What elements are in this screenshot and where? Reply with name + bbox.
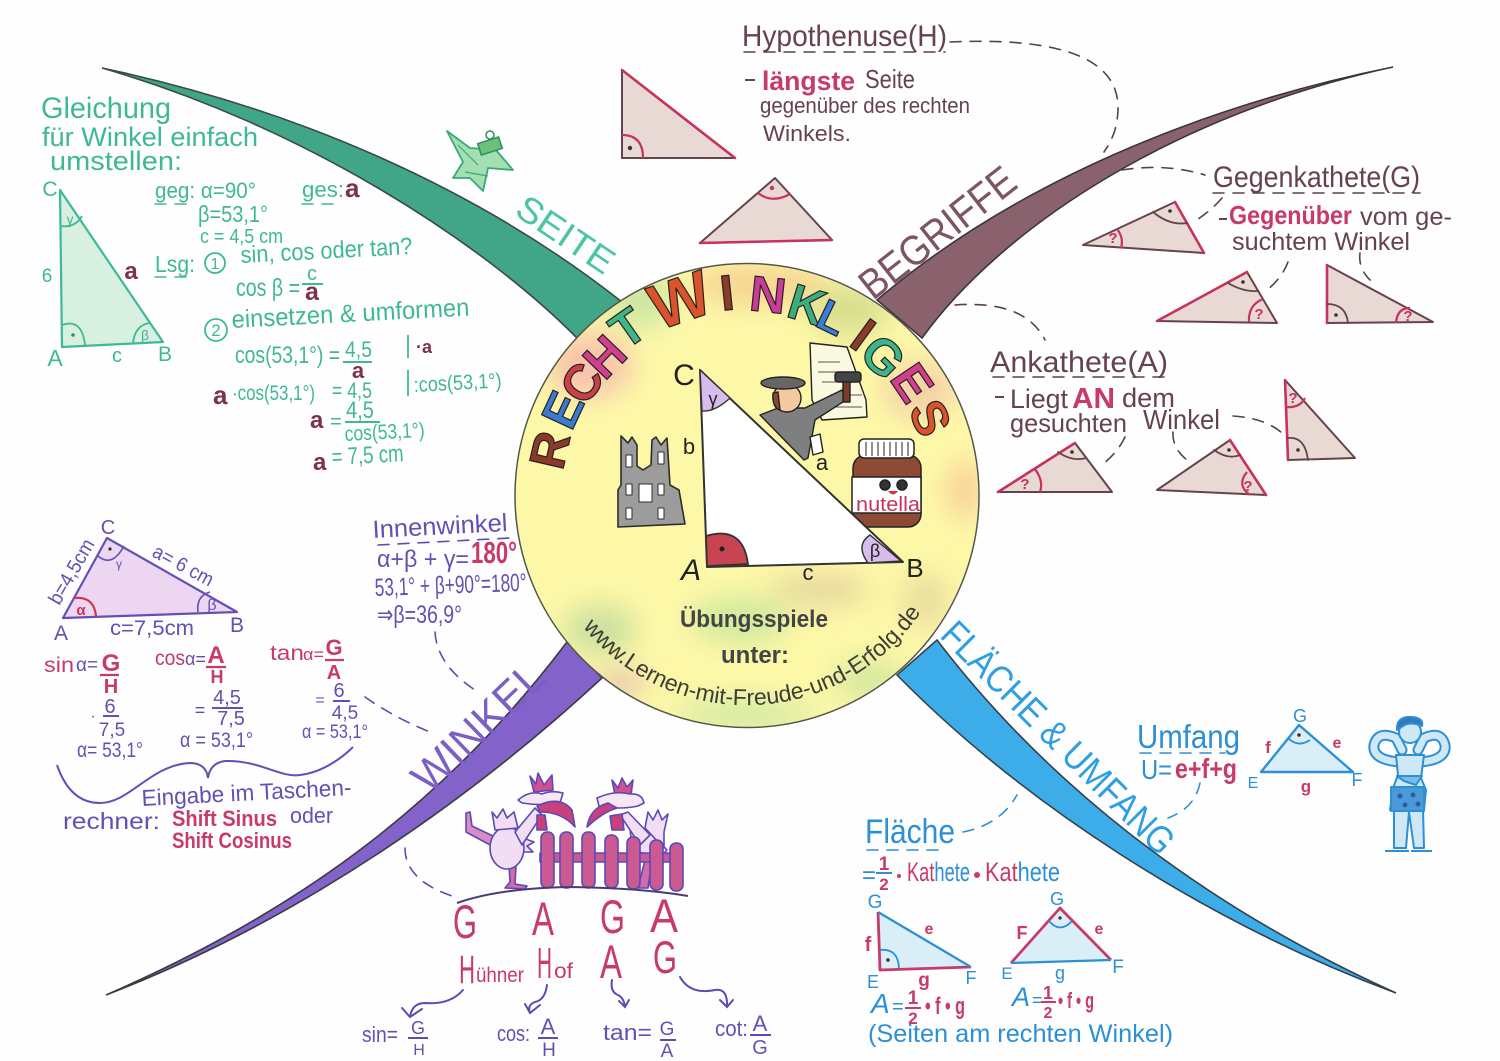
triangle: right angle at E: G: [868, 892, 882, 913]
area formula 2: A: [1010, 982, 1030, 1012]
step 1: sin cos oder tan: 1: [211, 256, 220, 273]
triangle with marked hypotenuse 2: [700, 178, 832, 243]
website url on circle: [585, 560, 919, 706]
panel: Flaeche: [862, 795, 1173, 1048]
formula: one half Kathete times Kathete: 1: [879, 854, 890, 875]
triangle G1: ?: [1108, 230, 1118, 247]
text: Eingabe im Taschenrechner: rechner:: [63, 808, 160, 834]
fence: [540, 832, 683, 891]
formula: U = e+f+g: e+f+g: [1175, 753, 1237, 784]
formula column: tan: G: [325, 635, 343, 660]
title: RECHTWINKLIGES: R: [519, 426, 581, 474]
triangle: right angle at E: f: [865, 934, 872, 956]
triangle ABC purple: A: [54, 622, 68, 645]
triangle ABC purple: [44, 517, 244, 645]
formula column: sin: G: [102, 650, 120, 677]
text: laengste Seite: Winkels.: [763, 121, 851, 146]
formula column: sin: 7,5: [99, 720, 125, 741]
triangle ABC green: A: [47, 345, 63, 371]
mnemonic letters: G A G A: A: [532, 892, 554, 945]
formula column: sin: H: [104, 676, 118, 698]
triangle EFG perimeter: e: [1333, 735, 1342, 752]
formula: one half Kathete times Kathete: [862, 854, 1060, 894]
formula column: tan: 6: [333, 680, 345, 702]
step 2: einsetzen und umformen: 2: [211, 321, 221, 340]
formulas: sin cos tan cot: H: [413, 1042, 425, 1059]
mnemonic letters: G A G A: G: [453, 895, 477, 948]
step 1: sin cos oder tan: Lsg:: [155, 251, 195, 277]
text: Eingabe im Taschenrechner: [63, 774, 352, 853]
connector: Innenwinkel to branch: [435, 632, 475, 690]
equations: angle sum: 53,1° + β+90°=180°: [374, 569, 527, 602]
triangle ABC purple: B: [230, 614, 244, 637]
text: Gegenueber vom gesuchten Winkel: [1219, 200, 1452, 256]
text: Gegenueber vom gesuchten Winkel: suchtem Winkel: [1232, 228, 1410, 256]
heading: Hypothenuse: Hypothenuse(H): [742, 20, 947, 53]
triangle A2: ?: [1243, 478, 1253, 495]
step 2: einsetzen und umformen: cos(53,1°): [344, 419, 425, 446]
text: liegt an dem gesuchten Winkel: gesuchten: [1010, 408, 1127, 438]
formula column: tan: α = 53,1°: [302, 722, 368, 743]
branch label: WINKEL: WINKEL: [402, 652, 555, 802]
triangle EFG perimeter: f: [1265, 738, 1271, 757]
step 2: einsetzen und umformen: =: [330, 411, 342, 433]
formula column: cos: α = 53,1°: [180, 729, 253, 752]
triangle vertex and side labels: [673, 359, 924, 587]
title: RECHTWINKLIGES: E: [531, 383, 595, 437]
connector: Gegenkathete to branch: [1122, 167, 1205, 175]
jar label: nutella: [856, 494, 921, 516]
branch: Seite (green): [102, 68, 622, 338]
triangle EFG perimeter: G: [1293, 706, 1307, 726]
step 2: einsetzen und umformen: = 4,5: [332, 378, 372, 403]
note: Seiten am rechten Winkel: (Seiten am rechten Winkel): [868, 1020, 1173, 1048]
triangle EFG perimeter: F: [1352, 770, 1362, 790]
triangle EFG perimeter: [1248, 706, 1362, 796]
area formula 1: • f • g: [925, 993, 965, 1020]
mnemonic words: Huehner Hof A G: of: [554, 960, 573, 983]
triangle ABC purple: γ: [116, 557, 122, 571]
text: laengste Seite: längste: [762, 66, 855, 96]
step 2: einsetzen und umformen: a: [213, 380, 228, 410]
triangle: right angle at E: E: [867, 972, 879, 992]
connector: formulas to branch: [365, 697, 430, 732]
triangle ABC green: γ: [66, 211, 74, 227]
triangle G3: [1327, 265, 1433, 325]
triangle A1: [998, 443, 1112, 493]
triangle: right angle at E: g: [918, 970, 930, 991]
step 2: einsetzen und umformen: cos(53,1°) =: [235, 342, 340, 369]
triangle ABC green: C: [42, 178, 58, 201]
step 1: sin cos oder tan: cos β =: [236, 274, 300, 302]
panel: Winkelfunktionen (purple, bottom left): [44, 517, 430, 853]
heading: Umfang: Umfang: [1137, 718, 1240, 755]
triangle: right angle at G: [1001, 889, 1124, 983]
step 2: einsetzen und umformen: ·a: [416, 337, 433, 357]
mnemonic words: Huehner Hof A G: G: [653, 932, 677, 983]
formula column: cos: H: [210, 667, 224, 687]
title: RECHTWINKLIGES: E: [879, 354, 945, 412]
triangle vertex and side labels: γ: [708, 389, 718, 409]
triangle A3: [1285, 380, 1355, 460]
centre text: Uebungsspiele unter: [680, 606, 828, 669]
area formula 1: [869, 988, 965, 1028]
formula: U = e+f+g: U=: [1141, 754, 1172, 785]
step 1: sin cos oder tan: c: [307, 263, 317, 285]
formulas: sin cos tan cot: H: [542, 1040, 556, 1061]
given values: β=53,1°: [198, 201, 268, 227]
step 2: einsetzen und umformen: 4,5: [345, 337, 372, 362]
triangle: right angle at G: E: [1001, 964, 1013, 983]
connectors: Gegenkathete triangles: [1192, 198, 1370, 290]
connector: Ankathete to branch: [955, 304, 1045, 340]
formula: one half Kathete times Kathete: =: [862, 862, 876, 889]
triangle ABC purple: c=7,5cm: [110, 617, 194, 640]
triangle ABC purple: C: [101, 517, 115, 539]
ground line: [457, 887, 688, 903]
triangle G1: [1083, 202, 1204, 253]
heading: Gleichung fuer Winkel: umstellen:: [50, 146, 182, 176]
triangle EFG perimeter: g: [1301, 777, 1311, 796]
triangle vertex and side labels: B: [906, 553, 924, 583]
triangle: right angle at E: F: [966, 968, 976, 988]
formula column: sin: α= 53,1°: [77, 739, 143, 762]
triangle: right angle at G: e: [1095, 921, 1104, 938]
formula: one half Kathete times Kathete: Kathete: [985, 857, 1060, 887]
text: liegt an dem gesuchten Winkel: [995, 383, 1220, 438]
left hen: [466, 773, 575, 889]
text: laengste Seite: [745, 64, 970, 146]
formulas: sin cos tan cot: tan=: [603, 1020, 652, 1045]
formulas: sin cos tan cot: A: [753, 1011, 768, 1036]
triangle ABC green: B: [158, 343, 172, 366]
formulas: sin cos tan cot: cos:: [497, 1021, 530, 1046]
formula column: sin: ·: [90, 708, 96, 725]
heading: Flaeche: Fläche: [865, 813, 955, 851]
formulas: sin cos tan cot: G: [752, 1037, 768, 1059]
connector: Hypothenuse to branch: [950, 41, 1118, 152]
title: RECHTWINKLIGES: [519, 256, 962, 474]
mnemonic words: Huehner Hof A G: H: [459, 948, 475, 992]
mnemonic letters: G A G A: [453, 889, 679, 948]
mnemonic letters: G A G A: A: [650, 889, 679, 942]
title: RECHTWINKLIGES: C: [549, 352, 615, 414]
formula: U = e+f+g: [1141, 753, 1237, 785]
title: RECHTWINKLIGES: H: [572, 325, 638, 389]
step 2: einsetzen und umformen: a: [310, 407, 324, 434]
step 1: sin cos oder tan: sin, cos oder tan?: [240, 233, 413, 269]
formula column: cos: 7,5: [217, 708, 245, 730]
text: Gegenueber vom gesuchten Winkel: vom ge-: [1360, 203, 1452, 231]
triangle G2: ?: [1254, 306, 1264, 323]
triangle ABC green: [42, 178, 172, 371]
formulas: sin cos tan cot: G: [411, 1018, 425, 1038]
equations: angle sum: [374, 535, 527, 629]
given values: a: [345, 173, 360, 203]
title: RECHTWINKLIGES: I: [717, 264, 737, 322]
branch: Flaeche und Umfang (blue): [897, 640, 1396, 993]
panel: Innenwinkel: [372, 509, 527, 690]
panel: GAGA Huehner Hof mnemonic: [362, 773, 771, 1061]
heading: Innenwinkel: Innenwinkel: [372, 509, 508, 544]
panel: Begriffe Hypothenuse (top centre): [622, 20, 1118, 243]
step 2: einsetzen und umformen: ·cos(53,1°): [232, 382, 315, 405]
text: Eingabe im Taschenrechner: Shift Sinus: [172, 806, 277, 831]
triangle: right angle at G: F: [1112, 957, 1124, 978]
heading: Gleichung fuer Winkel: [41, 92, 258, 176]
triangle: right angle at G: g: [1055, 963, 1065, 983]
equations: angle sum: ⇒β=36,9°: [377, 601, 462, 629]
formula column: tan: 4,5: [332, 703, 358, 724]
title: RECHTWINKLIGES: G: [849, 323, 917, 391]
central right triangle: [673, 359, 924, 587]
text: Eingabe im Taschenrechner: oder: [290, 803, 333, 828]
area formula 1: 2: [908, 1009, 918, 1028]
formula column: tan: α=: [303, 645, 324, 664]
panel: Ankathete: [955, 304, 1355, 495]
area formula 2: 1: [1043, 983, 1053, 1003]
title: RECHTWINKLIGES: K: [782, 273, 832, 337]
title: RECHTWINKLIGES: S: [898, 392, 962, 444]
formula: one half Kathete times Kathete: 2: [879, 875, 889, 894]
branch: Winkel (purple): [106, 642, 602, 995]
right hen: [587, 778, 668, 888]
area formula 1: A: [869, 988, 890, 1019]
triangle: right angle at E: e: [925, 921, 934, 938]
step 2: einsetzen und umformen: :cos(53,1°): [413, 369, 502, 397]
heading: Gleichung fuer Winkel: Gleichung: [41, 92, 171, 125]
triangle vertex and side labels: b: [683, 434, 695, 459]
central circle: [514, 216, 980, 728]
text: Gegenueber vom gesuchten Winkel: Gegenüber: [1229, 200, 1352, 230]
triangle ABC purple: α: [76, 602, 86, 619]
formula: one half Kathete times Kathete: Kathete: [907, 857, 970, 887]
icon: cathedral: [618, 436, 685, 527]
branch label: BEGRIFFE: BEGRIFFE: [850, 157, 1025, 308]
formula column: tan: [270, 635, 368, 743]
triangle EFG perimeter: E: [1248, 775, 1258, 792]
triangle A1: ?: [1020, 476, 1030, 493]
step 2: einsetzen und umformen: a: [313, 449, 327, 476]
step 1: sin cos oder tan: a: [305, 278, 320, 306]
triangle ABC green: a: [124, 258, 138, 285]
triangle: right angle at G: G: [1050, 889, 1064, 909]
triangle ABC purple: β: [207, 597, 217, 614]
area formula 2: =: [1032, 990, 1043, 1010]
icon: green star with hat: [447, 131, 513, 191]
formulas: sin cos tan cot: G: [660, 1019, 674, 1040]
triangle A2: [1157, 440, 1266, 495]
step 2: einsetzen und umformen: = 7,5 cm: [331, 440, 404, 471]
step 2: einsetzen und umformen: [205, 294, 502, 476]
title: RECHTWINKLIGES: N: [747, 265, 789, 325]
formulas: sin cos tan cot: [362, 1011, 771, 1061]
step 1: sin cos oder tan: [155, 233, 413, 306]
mnemonic words: Huehner Hof A G: ühner: [476, 964, 524, 987]
given values: ges:: [302, 177, 344, 202]
triangle ABC green: β: [141, 327, 149, 343]
heading: Ankathete: Ankathete(A): [990, 346, 1168, 379]
icon: nutella jar: [852, 439, 921, 527]
formulas: sin cos tan cot: sin=: [362, 1022, 398, 1047]
arrows to formulas: [402, 977, 733, 1017]
text: liegt an dem gesuchten Winkel: Liegt: [1010, 384, 1068, 414]
given values: geg: α=90°: [155, 178, 256, 203]
illustration: muscular man in swim trunks: [1374, 717, 1445, 851]
formulas: sin cos tan cot: cot:: [715, 1016, 748, 1041]
given values: c = 4,5 cm: [200, 226, 283, 248]
equations: angle sum: 180°: [471, 535, 517, 570]
triangle with marked hypotenuse 1: [622, 70, 735, 158]
title: RECHTWINKLIGES: L: [809, 290, 855, 346]
area formula 1: =: [892, 996, 904, 1018]
triangle ABC green: c: [112, 345, 122, 367]
branch label: SEITE: SEITE: [509, 187, 623, 282]
given values: [155, 173, 360, 248]
website url on circle: www.Lernen-mit-Freude-und-Erfolg.de: [585, 608, 919, 706]
triangle G2: [1157, 272, 1277, 323]
connector: hens to branch: [405, 848, 452, 896]
branch label: FLAECHE UND UMFANG: FLÄCHE & UMFANG: [932, 613, 1183, 864]
area formula 2: • f • g: [1058, 988, 1094, 1013]
brace: [57, 747, 353, 803]
illustration: two hens behind fence: [457, 773, 688, 903]
step 2: einsetzen und umformen: 4,5: [346, 397, 374, 424]
area formula 1: 1: [908, 988, 919, 1009]
text: liegt an dem gesuchten Winkel: dem: [1122, 383, 1175, 413]
formula column: sin: sin: [44, 654, 74, 677]
panel: Gegenkathete: [1083, 161, 1452, 325]
triangle vertex and side labels: c: [802, 560, 814, 585]
triangle ABC purple: a= 6 cm: [149, 541, 217, 591]
triangle ABC green: 6: [42, 266, 52, 287]
area formula 2: 2: [1044, 1005, 1053, 1022]
panel: Umfang: [1137, 706, 1445, 851]
step 2: einsetzen und umformen: einsetzen & umformen: [231, 294, 470, 334]
heading: Gegenkathete: Gegenkathete(G): [1213, 161, 1420, 194]
triangle G3: ?: [1403, 308, 1413, 325]
formula column: sin: [44, 650, 143, 762]
formula column: cos: cos: [155, 647, 185, 670]
triangle vertex and side labels: C: [673, 359, 695, 392]
text: Eingabe im Taschenrechner: Shift Cosinus: [172, 828, 292, 853]
icon: Luther with hammer and thesis paper: [760, 343, 867, 460]
formula column: cos: 4,5: [213, 687, 241, 709]
formula column: sin: 6: [104, 696, 116, 718]
triangle: right angle at E: [865, 892, 976, 992]
title: RECHTWINKLIGES: T: [599, 296, 657, 360]
centre text: Uebungsspiele unter: unter:: [721, 642, 789, 669]
formula column: sin: α=: [76, 655, 98, 676]
panel: Gleichung umstellen (green, top left): [41, 92, 502, 476]
connector: Umfang to branch: [1168, 783, 1200, 818]
triangle vertex and side labels: A: [679, 554, 701, 587]
text: liegt an dem gesuchten Winkel: Winkel: [1143, 404, 1220, 435]
formula column: cos: A: [207, 642, 225, 669]
formula column: tan: =: [315, 692, 325, 709]
text: liegt an dem gesuchten Winkel: AN: [1072, 383, 1115, 415]
triangle ABC purple: b=4,5cm: [44, 535, 100, 609]
branch: Begriffe (brown): [877, 67, 1393, 338]
formula column: cos: α=: [185, 649, 206, 669]
area formula 2: [1010, 982, 1094, 1022]
text: Eingabe im Taschenrechner: Eingabe im Taschen-: [141, 774, 352, 811]
title: RECHTWINKLIGES: I: [841, 308, 885, 362]
title: RECHTWINKLIGES: W: [640, 256, 721, 344]
mnemonic letters: G A G A: G: [600, 890, 625, 943]
formula column: tan: A: [327, 662, 341, 684]
mnemonic words: Huehner Hof A G: H: [537, 939, 552, 988]
mnemonic words: Huehner Hof A G: [459, 932, 677, 992]
triangle: right angle at G: F: [1016, 923, 1028, 943]
connector: Flaeche to branch: [963, 795, 1017, 832]
formula column: tan: tan: [270, 642, 304, 665]
connectors: Ankathete triangles: [1102, 416, 1282, 465]
formula column: cos: =: [195, 700, 205, 720]
mnemonic words: Huehner Hof A G: A: [600, 935, 622, 988]
formulas: sin cos tan cot: A: [541, 1014, 556, 1039]
heading: Gleichung fuer Winkel: für Winkel einfach: [42, 122, 258, 152]
step 2: einsetzen und umformen: a: [352, 358, 365, 383]
text: laengste Seite: Seite: [865, 64, 915, 94]
triangle vertex and side labels: β: [870, 541, 880, 561]
triangle A3: ?: [1288, 390, 1298, 407]
text: laengste Seite: gegenüber des rechten: [760, 93, 970, 118]
equations: angle sum: α+β + γ=: [377, 546, 469, 573]
centre text: Uebungsspiele unter: Übungsspiele: [680, 606, 828, 633]
formula column: cos: [155, 642, 253, 752]
triangle vertex and side labels: a: [816, 450, 829, 475]
